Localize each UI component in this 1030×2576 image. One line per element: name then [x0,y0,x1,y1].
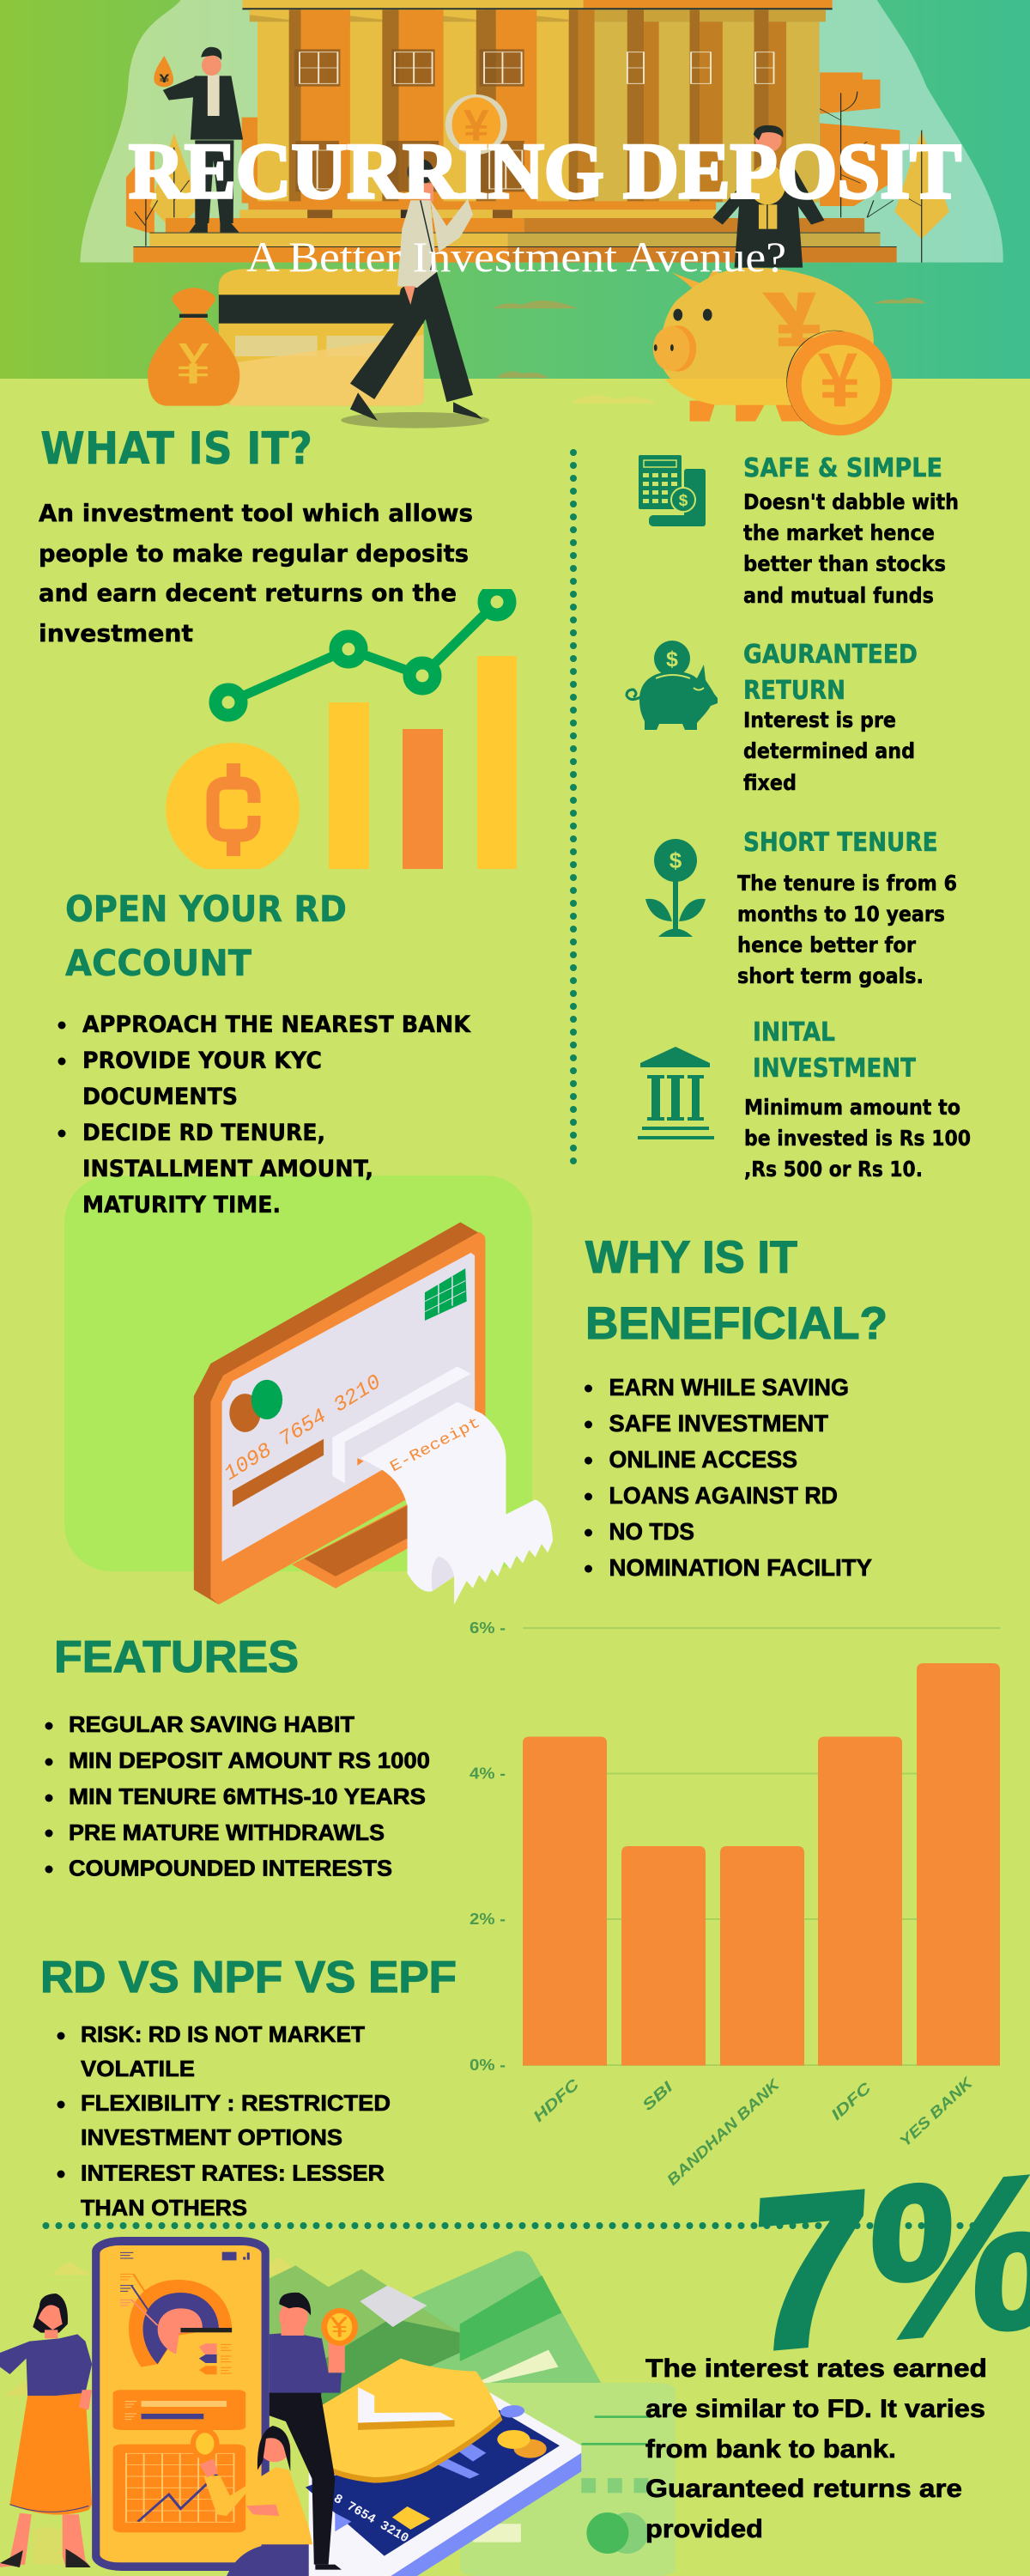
section: features [45,1632,430,1880]
panel: initial investment [638,1018,971,1182]
panel: guaranteed return [627,640,918,795]
list: comparison: THAN OTHERS [81,2195,247,2221]
heading: short tenure: SHORT TENURE [743,828,937,858]
banknotes [270,2265,460,2415]
trees and bushes [126,72,949,263]
definition text: investment [39,619,193,647]
list: features: REGULAR SAVING HABIT [69,1711,354,1737]
list: comparison: VOLATILE [81,2056,195,2081]
heading: what is it: WHAT IS IT? [40,423,312,475]
list: comparison: INVESTMENT OPTIONS [81,2124,342,2150]
definition text [39,499,473,647]
list: comparison: INTEREST RATES: LESSER [81,2160,385,2186]
receipt slot [332,1366,471,1483]
text: initial investment [744,1095,971,1182]
list: features [45,1711,430,1880]
background shapes [3,2251,676,2576]
list: benefits: SAFE INVESTMENT [609,1410,828,1437]
woman with magnifying glass [341,96,504,428]
text: interest rate note: The interest rates earned [645,2354,987,2383]
text: guaranteed return: fixed [743,770,797,795]
coin [787,331,892,435]
panel: safe and simple [639,453,959,608]
text: interest rate note: are similar to FD. It varies [645,2395,985,2423]
man with money bag: ¥ [159,71,169,85]
list: steps: APPROACH THE NEAREST BANK [82,1012,471,1038]
text: interest rate note [645,2354,987,2543]
heading: guaranteed return: RETURN [743,676,845,706]
piggy bank [653,268,874,422]
credit card behind woman [219,269,424,406]
text: initial investment: Minimum amount to [744,1095,960,1120]
heading: open your rd account: ACCOUNT [65,942,251,984]
illustration: card monitor with e-receipt [194,1222,553,1605]
text: short tenure: months to 10 years [737,902,945,927]
list: comparison [57,2021,391,2221]
background hill [80,0,1003,263]
y axis labels: 6% - [470,1619,506,1637]
heading: open your rd account: OPEN YOUR RD [65,888,347,930]
heading: initial investment [753,1018,916,1084]
receipt [360,1402,553,1605]
dotted divider [46,2222,991,2229]
text: short tenure: The tenure is from 6 [737,871,957,896]
definition text: An investment tool which allows [39,499,473,527]
phone [92,2237,270,2571]
icon: piggy bank [627,641,718,730]
small hills [493,297,926,404]
icon: calculator: $ [679,492,688,510]
section: rd vs npf vs epf [40,1953,457,2221]
payment card [306,2389,581,2576]
text: guaranteed return: Interest is pre [743,708,896,732]
x axis labels: YES BANK [896,2073,977,2150]
heading: why is it beneficial [585,1232,888,1349]
list: benefits [585,1374,872,1581]
text: interest rate note: from bank to bank. [645,2435,896,2464]
text: short tenure: short term goals. [737,963,924,988]
y axis labels: 0% - [470,2057,506,2074]
heading: initial investment: INVESTMENT [753,1054,916,1084]
list: benefits: LOANS AGAINST RD [609,1482,838,1509]
light green panel [64,1176,532,1571]
icon: bank [638,1047,714,1139]
heading: guaranteed return [743,640,918,706]
card number: 8 7654 3210 [331,2492,411,2546]
stand [292,1503,410,1589]
man with coin [712,125,824,268]
list: features: MIN DEPOSIT AMOUNT RS 1000 [69,1747,430,1773]
list: steps: DECIDE RD TENURE, [82,1120,325,1146]
icon: growth chart with coin [215,589,517,869]
icon: calculator [639,455,706,526]
x axis labels: BANDHAN BANK [663,2075,784,2189]
x axis labels [530,2073,977,2189]
list: benefits: EARN WHILE SAVING [609,1374,849,1400]
list: benefits: ONLINE ACCESS [609,1446,797,1473]
text: safe and simple: and mutual funds [743,583,934,608]
text: safe and simple: the market hence [743,520,935,545]
text: guaranteed return: determined and [743,738,915,763]
y axis labels: 2% - [470,1911,506,1928]
section: what is it [39,423,473,647]
man with coin [270,2293,358,2570]
list: benefits: NOMINATION FACILITY [609,1554,872,1581]
text: interest rate note: Guaranteed returns are [645,2475,962,2503]
list: features: PRE MATURE WITHDRAWLS [69,1820,385,1845]
x axis labels: SBI [639,2077,676,2114]
text: initial investment: ,Rs 500 or Rs 10. [744,1157,923,1182]
subtitle: A Better Investment Avenue? [246,233,786,281]
text: safe and simple: better than stocks [743,551,946,576]
icon: piggy bank: $ [666,647,678,671]
definition text: and earn decent returns on the [39,579,457,607]
x axis labels: IDFC [827,2078,876,2123]
x axis labels: HDFC [530,2075,583,2125]
icon: coin [166,743,300,875]
y axis labels [470,1619,506,2074]
list: comparison: FLEXIBILITY : RESTRICTED [81,2090,391,2116]
list: steps: PROVIDE YOUR KYC [82,1048,322,1074]
text: short tenure: hence better for [737,933,917,957]
section: why is it beneficial [585,1232,888,1581]
list: steps: DOCUMENTS [82,1084,238,1110]
panel: short tenure [645,828,957,988]
bank building [133,0,897,263]
list: steps: MATURITY TIME. [82,1192,281,1218]
bars [523,1663,1000,2066]
list: steps: INSTALLMENT AMOUNT, [82,1156,373,1182]
card number: 1098 7654 3210 [221,1371,385,1486]
shield [318,2359,502,2483]
y axis labels: 4% - [470,1765,506,1783]
list: steps [58,1012,471,1218]
bar chart: interest rates by bank [470,1619,1000,2189]
woman with magnifying glass: ¥ [464,101,489,150]
text: safe and simple [743,489,959,608]
heading: safe and simple: SAFE & SIMPLE [743,453,942,483]
man with money bag [154,47,243,233]
seated woman with coin [191,2426,312,2576]
woman with orange skirt [0,2293,92,2567]
title: RECURRING DEPOSIT [129,127,961,215]
text: interest rate note: provided [645,2515,763,2543]
heading: initial investment: INITAL [753,1018,835,1048]
list: benefits: NO TDS [609,1518,694,1545]
heading: guaranteed return: GAURANTEED [743,640,918,670]
text: short tenure [737,871,957,988]
definition text: people to make regular deposits [39,539,469,568]
heading: why is it beneficial: BENEFICIAL? [585,1298,888,1349]
text: guaranteed return [743,708,915,795]
dotted divider [570,453,577,1162]
monitor body [194,1222,482,1605]
text: initial investment: be invested is Rs 100 [744,1126,971,1151]
icon: money plant [645,839,706,937]
list: features: MIN TENURE 6MTHS-10 YEARS [69,1783,426,1809]
icon: money plant: $ [670,848,682,873]
money bag [148,288,239,406]
heading: features: FEATURES [54,1632,299,1682]
heading: rd vs npf vs epf: RD VS NPF VS EPF [40,1953,457,2002]
heading: why is it beneficial: WHY IS IT [585,1232,797,1283]
header banner illustration [0,0,1030,435]
text: safe and simple: Doesn't dabble with [743,489,959,514]
illustration: people, phone, shield and card [0,2237,676,2576]
list: features: COUMPOUNDED INTERESTS [69,1855,392,1880]
list: comparison: RISK: RD IS NOT MARKET [81,2021,365,2047]
heading: open your rd account [65,888,347,984]
e-receipt label: E-Receipt [387,1414,483,1476]
section: open your rd account [58,888,471,1218]
